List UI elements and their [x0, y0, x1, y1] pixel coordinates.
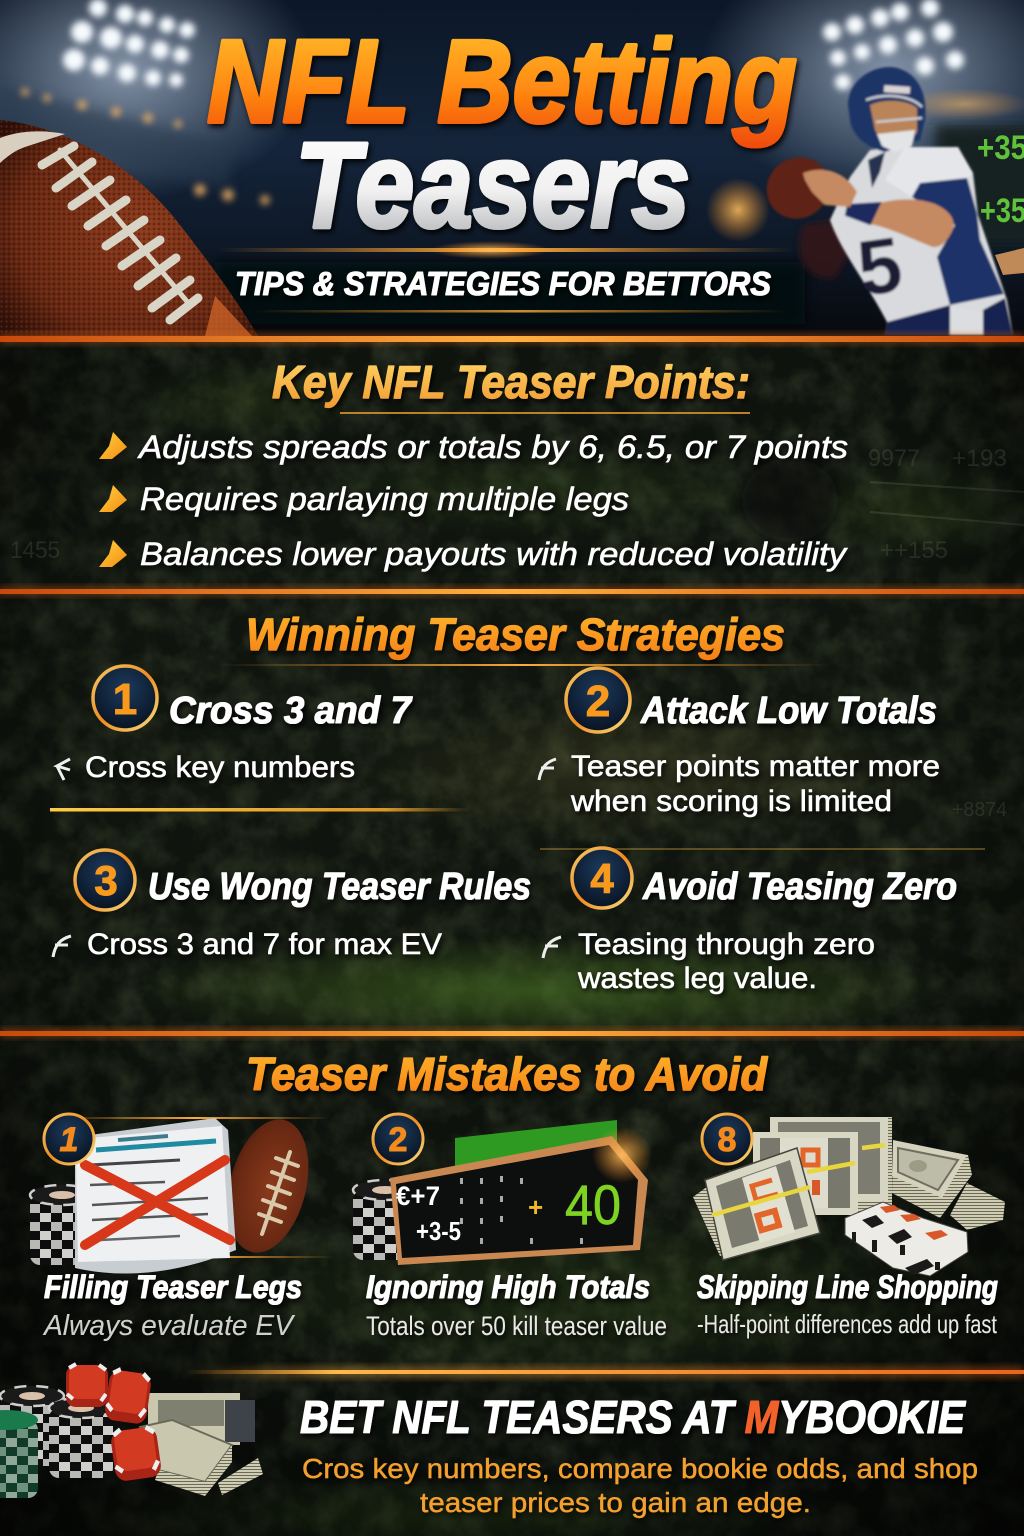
- background: faint odds numbers: +193: [952, 445, 1007, 472]
- mistake 1 title: Filling Teaser Legs: [44, 1269, 302, 1305]
- badge 3: [75, 850, 135, 910]
- badge 8: [702, 1114, 752, 1164]
- strategy 3 title: Use Wong Teaser Rules: [148, 866, 531, 908]
- section rule: footer: [185, 1366, 1024, 1378]
- strategy 4 text: wastes leg value.: [577, 962, 817, 995]
- icon: hook bullet: [543, 937, 561, 958]
- strategy 4 title: Avoid Teasing Zero: [642, 866, 957, 908]
- background: faint odds numbers: 1455: [10, 537, 60, 564]
- badge 2: 2: [389, 1121, 407, 1159]
- strategy 4 text: Teasing through zero: [578, 928, 875, 961]
- subtitle: TIPS & STRATEGIES FOR BETTORS: [235, 265, 771, 302]
- badge 1: [93, 666, 157, 730]
- illustration: quarterback player: [755, 67, 1024, 335]
- icon: bullet arrow 3: [99, 540, 127, 567]
- illustration: odds scoreboard with chips: +: [528, 1192, 543, 1222]
- heading: key points: Key NFL Teaser Points:: [272, 356, 750, 408]
- icon: hook bullet: [57, 759, 70, 780]
- icon: hook bullet: [53, 936, 71, 957]
- background: faint odds numbers: +8874: [952, 799, 1007, 821]
- strategy 1 title: Cross 3 and 7: [169, 690, 413, 732]
- badge 8: 8: [718, 1121, 736, 1159]
- panel: mistake 1: [30, 1111, 335, 1342]
- strategy 3 text: Cross 3 and 7 for max EV: [87, 928, 442, 961]
- icon: bullet arrow 2: [99, 485, 127, 512]
- badge 2: [566, 668, 630, 732]
- panel: strategy 2: [539, 668, 940, 818]
- badge 3: 3: [94, 857, 118, 904]
- strategy 2 title: Attack Low Totals: [640, 690, 937, 732]
- illustration: odds scoreboard with chips: +3-5: [416, 1216, 461, 1246]
- badge 1: [44, 1114, 94, 1164]
- call to action text: Cros key numbers, compare bookie odds, and shop: [302, 1453, 978, 1484]
- badge 2: 2: [586, 677, 610, 726]
- background: faint odds numbers: 9977: [868, 445, 920, 472]
- bullet text 3: Balances lower payouts with reduced volatility: [140, 536, 848, 572]
- strategy 2 text: Teaser points matter more: [571, 750, 940, 783]
- bullet text 2: Requires parlaying multiple legs: [140, 481, 629, 517]
- panel: strategy 1: [57, 666, 413, 784]
- strategy 2 text: [570, 750, 940, 818]
- panel: mistake 2: [353, 1114, 667, 1341]
- illustration: crossed-out bet slip, chips and football: [30, 1111, 335, 1274]
- icon: hook bullet: [539, 759, 556, 780]
- strategy 1 text: Cross key numbers: [85, 751, 355, 784]
- heading: mistakes: Teaser Mistakes to Avoid: [246, 1048, 768, 1100]
- panel: strategy 3: [53, 850, 531, 961]
- illustration: quarterback player: 5: [852, 220, 907, 313]
- badge 4: 4: [590, 855, 614, 902]
- call to action text: [302, 1453, 978, 1518]
- title: Teasers: [295, 117, 690, 253]
- badge 1: 1: [60, 1121, 78, 1159]
- call to action heading: BET NFL TEASERS AT MYBOOKIE: [300, 1391, 966, 1443]
- panel: mistake 3: [693, 1114, 1005, 1339]
- illustration: odds scoreboard with chips: €+7: [396, 1181, 440, 1211]
- background: faint odds numbers: ++155: [880, 537, 948, 564]
- badge 1: 1: [113, 675, 137, 724]
- list: key teaser points: [99, 429, 848, 572]
- illustration: odds scoreboard with chips: 40: [565, 1173, 621, 1236]
- heading: strategies: Winning Teaser Strategies: [246, 609, 785, 660]
- strategy 2 text: when scoring is limited: [570, 785, 892, 818]
- badge 2: [373, 1114, 423, 1164]
- illustration: football: [0, 120, 258, 336]
- icon: bullet arrow 1: [99, 432, 127, 459]
- illustration: chips and cash: [0, 1364, 263, 1498]
- mistake 2 title: Ignoring High Totals: [366, 1269, 650, 1305]
- title: NFL Betting: [207, 16, 797, 148]
- title: [207, 16, 797, 253]
- panel: stadium header background: [0, 0, 1024, 336]
- background: faint odds numbers: [10, 445, 1007, 821]
- call to action text: teaser prices to gain an edge.: [420, 1487, 811, 1518]
- illustration: cash stacks and dice: [693, 1117, 1005, 1276]
- section rule: strategies: [0, 1028, 1024, 1038]
- mistake 1 text: Always evaluate EV: [42, 1310, 296, 1342]
- divider: strategies left: [50, 808, 470, 812]
- section rule: header: [0, 333, 1024, 344]
- panel: strategy 4: [543, 848, 957, 995]
- bullet text 1: Adjusts spreads or totals by 6, 6.5, or 7 points: [137, 429, 848, 465]
- header glow divider: [215, 241, 795, 312]
- mistake 2 text: Totals over 50 kill teaser value: [366, 1311, 667, 1341]
- divider: strategies right: [540, 848, 985, 850]
- section rule: points: [0, 586, 1024, 596]
- illustration: odds scoreboard with chips: [353, 1120, 652, 1265]
- strategy 4 text: [577, 928, 875, 995]
- badge 4: [572, 848, 632, 908]
